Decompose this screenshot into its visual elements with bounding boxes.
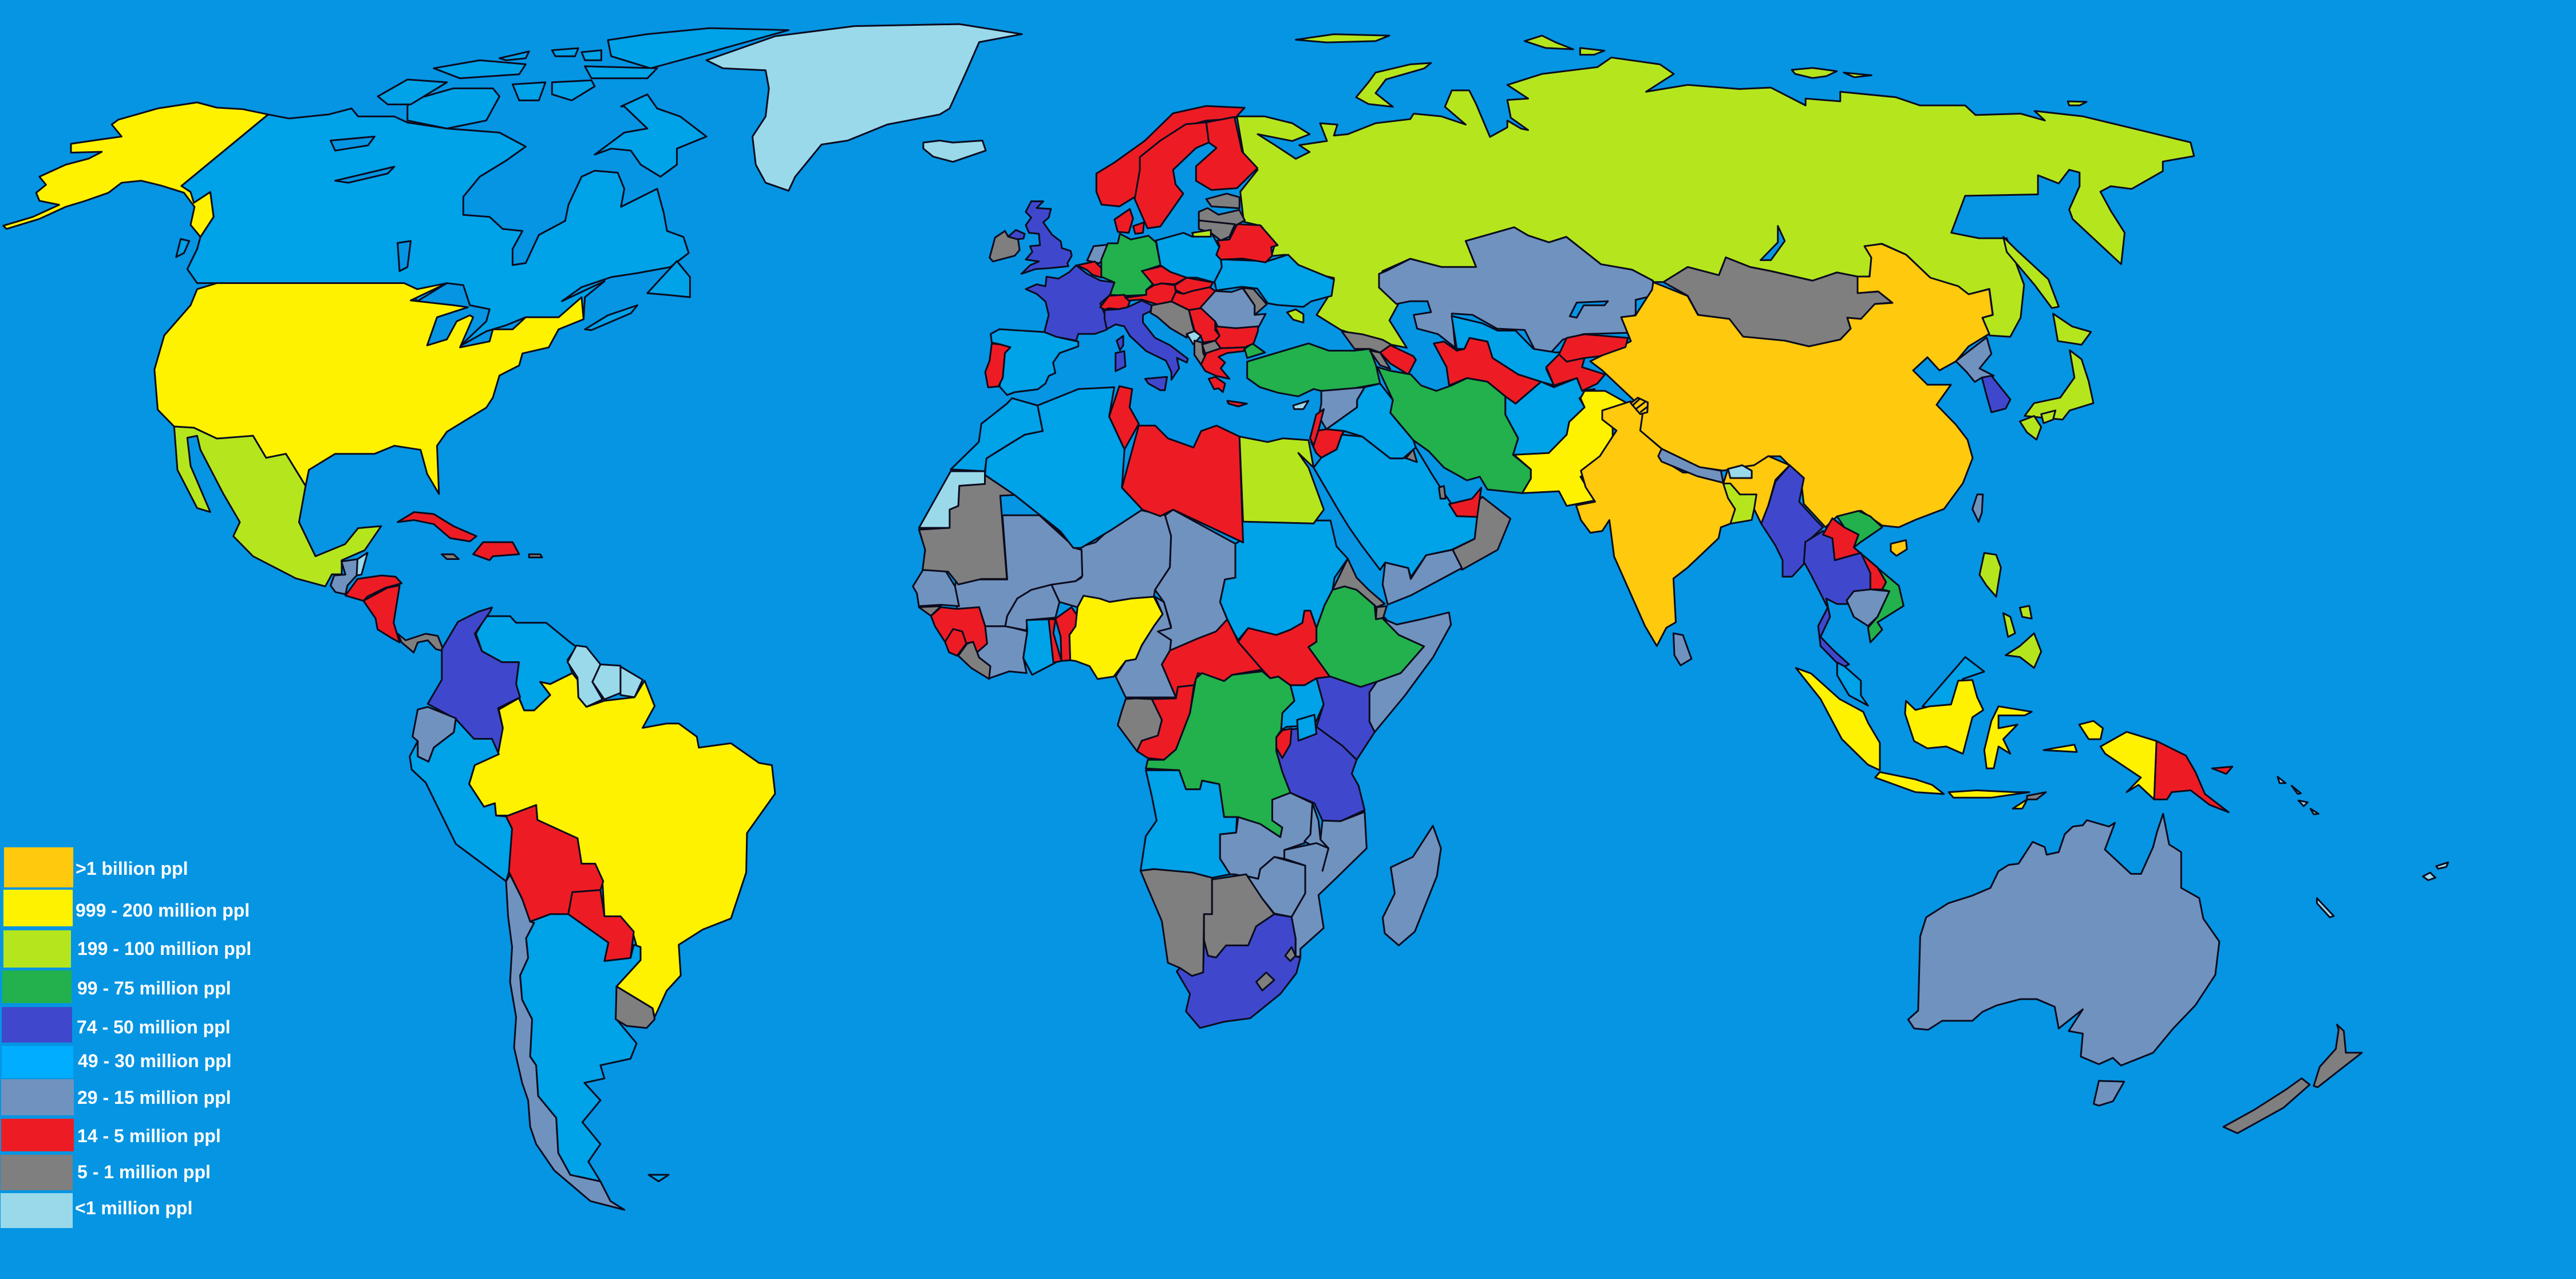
country: Belarus — [1216, 224, 1278, 262]
country: Kyrgyzstan — [1556, 334, 1628, 362]
country: Kazakhstan — [1379, 227, 1653, 354]
country: Mexico — [174, 427, 381, 586]
legend item: 5 to 1 million: 5 - 1 million ppl — [77, 1162, 211, 1182]
country: Taiwan — [1973, 495, 1983, 522]
country: Togo — [1049, 619, 1061, 663]
country: Uruguay — [616, 986, 655, 1028]
region: northern Eurasia — [1237, 34, 2194, 354]
country: Nigeria — [1069, 596, 1163, 679]
country: Indonesia — [1796, 668, 2156, 808]
country: Slovakia — [1175, 278, 1213, 294]
country: Azerbaijan — [1380, 345, 1416, 374]
legend — [1, 847, 251, 1228]
country: Niger — [1040, 508, 1173, 607]
country: Cyprus — [1293, 401, 1309, 409]
country: Madagascar — [1382, 826, 1441, 945]
country: Hungary — [1171, 287, 1215, 310]
country: Eritrea — [1333, 559, 1385, 607]
territory: Western Sahara — [919, 471, 985, 528]
country: Mongolia — [1664, 258, 1893, 346]
country: Nepal — [1658, 449, 1723, 483]
territory: Kashmir hatched — [1631, 398, 1648, 414]
country: Tajikistan — [1546, 354, 1605, 391]
country: Myanmar — [1761, 465, 1823, 577]
legend item: 5 to 1 million — [1, 1155, 211, 1190]
country: Ukraine — [1214, 255, 1334, 307]
country: Pakistan — [1514, 391, 1628, 506]
region: Western and Central Europe — [985, 202, 1278, 406]
islands: Falklands — [649, 1175, 669, 1182]
country: Saudi Arabia — [1314, 435, 1477, 577]
country: Somalia — [1369, 613, 1451, 732]
country: Lesotho — [1256, 973, 1274, 990]
country: Vietnam — [1837, 511, 1903, 642]
country: Thailand — [1804, 531, 1870, 668]
country: Lithuania — [1199, 220, 1235, 240]
country: Ivory Coast — [977, 626, 1028, 678]
country: Mali — [955, 515, 1082, 626]
country: Spain — [991, 329, 1078, 395]
country: Belgium — [1077, 262, 1103, 278]
legend item: 29 to 15 million — [1, 1079, 231, 1115]
country: French Guiana — [621, 666, 643, 697]
country: Serbia — [1189, 308, 1220, 342]
country: Greece — [1201, 348, 1247, 406]
country: Germany — [1101, 234, 1160, 296]
country: Turkey — [1244, 344, 1380, 396]
legend item: 14 to 5 million — [1, 1119, 221, 1151]
country: Philippines — [1980, 553, 2041, 668]
legend item: 99 to 75 million — [2, 970, 231, 1003]
legend item: over 1 billion — [4, 847, 188, 887]
country: Zambia — [1220, 793, 1313, 879]
legend item: 14 to 5 million: 14 - 5 million ppl — [77, 1126, 221, 1146]
country: Botswana — [1204, 874, 1274, 958]
country: Zimbabwe — [1246, 857, 1305, 917]
country: United States (lower 48) — [155, 283, 583, 494]
country: Cameroon — [1116, 597, 1176, 697]
country: Sweden — [1135, 123, 1209, 228]
island: Hainan — [1891, 540, 1907, 556]
country: New Zealand — [2223, 1025, 2362, 1133]
country: Tanzania — [1277, 727, 1365, 821]
country: Iraq — [1326, 384, 1416, 459]
country: Peru — [410, 719, 512, 881]
country: Yemen — [1382, 550, 1462, 605]
country: North Korea — [1956, 337, 1994, 382]
country: Alaska — [3, 102, 268, 237]
country: East Timor — [2027, 792, 2046, 799]
country: DR Congo — [1146, 672, 1294, 837]
country: Panama — [398, 634, 444, 653]
country: Uzbekistan — [1452, 316, 1572, 385]
country: Austria — [1125, 283, 1176, 305]
country: Norway — [1096, 106, 1244, 207]
country: Algeria — [985, 387, 1143, 548]
region: Oceania — [1908, 777, 2448, 1133]
country: Laos — [1823, 518, 1886, 590]
country: Burkina Faso — [1005, 585, 1060, 630]
region: Central and South America — [330, 552, 775, 1210]
country: Libya — [1122, 425, 1243, 543]
country: Oman — [1453, 497, 1511, 570]
country: Ecuador — [413, 707, 456, 761]
country: Mauritania — [919, 475, 1014, 585]
country: Macedonia — [1202, 341, 1220, 354]
country: Iran — [1377, 367, 1531, 493]
country: Jamaica — [441, 554, 459, 559]
country: Montenegro — [1187, 331, 1201, 345]
country: Angola — [1140, 770, 1237, 878]
country: India — [1576, 401, 1789, 646]
country: Qatar — [1439, 486, 1445, 499]
country: New Caledonia and Pacific islands — [2278, 777, 2448, 917]
country: South Africa — [1177, 914, 1301, 1028]
country: Guyana — [567, 646, 602, 707]
country: Guinea — [931, 607, 987, 652]
legend item: 49 to 30 million — [2, 1046, 231, 1078]
country: Croatia and Bosnia — [1151, 302, 1195, 338]
lake: Victoria — [1297, 714, 1317, 741]
country: Honduras — [345, 575, 402, 601]
territory: Kaliningrad — [1192, 230, 1211, 236]
region: Nordics, Eastern Europe, North Africa and Middle East — [919, 106, 1628, 605]
country: Canada — [176, 28, 789, 346]
country: Republic of Congo — [1137, 685, 1194, 760]
country: Gabon — [1117, 698, 1162, 751]
country: Bangladesh — [1723, 484, 1756, 524]
country: Estonia — [1206, 194, 1239, 208]
country: Italy — [1105, 301, 1188, 390]
country: Sri Lanka — [1673, 633, 1692, 665]
country: Portugal — [985, 344, 1010, 388]
legend item: 999 to 200 million — [3, 890, 250, 926]
country: Guatemala — [330, 559, 357, 594]
country: Greenland — [706, 24, 1022, 191]
legend item: under 1 million — [1, 1193, 192, 1228]
region: South and East Asia — [1576, 314, 2233, 812]
country: Finland — [1196, 117, 1258, 190]
country: France — [1026, 265, 1115, 341]
legend item: 74 to 50 million — [2, 1007, 230, 1043]
country: Iceland — [923, 141, 986, 162]
legend item: 49 to 30 million: 49 - 30 million ppl — [78, 1051, 231, 1071]
country: Guinea-Bissau — [919, 606, 941, 616]
country: Ireland — [990, 231, 1020, 262]
country: Russia — [1237, 34, 2194, 348]
country: Sudan — [1220, 520, 1348, 640]
country: Malawi — [1305, 803, 1329, 871]
region: Sub-Saharan Africa — [913, 508, 1451, 1028]
country: United Arab Emirates — [1449, 488, 1481, 517]
country: Cambodia — [1847, 590, 1890, 626]
country: Puerto Rico — [529, 554, 542, 558]
country: Egypt — [1239, 436, 1324, 523]
country: Chad — [1155, 510, 1235, 650]
legend item: 29 to 15 million: 29 - 15 million ppl — [77, 1087, 231, 1108]
country: Papua New Guinea — [2154, 741, 2233, 812]
country: Argentina — [520, 914, 641, 1182]
country: United Kingdom — [1008, 202, 1072, 274]
legend item: 199 to 100 million: 199 - 100 million ppl — [77, 938, 251, 959]
country: Venezuela — [476, 616, 576, 710]
legend item: 74 to 50 million: 74 - 50 million ppl — [77, 1017, 230, 1037]
country: Uganda — [1281, 678, 1323, 731]
country: Kuwait — [1406, 449, 1417, 462]
country: Netherlands — [1087, 244, 1108, 263]
country: Denmark — [1115, 209, 1144, 234]
country: Colombia — [428, 607, 520, 754]
country: Latvia — [1199, 208, 1245, 225]
region: North America — [3, 24, 1022, 586]
country: Bulgaria — [1215, 326, 1258, 348]
country: Georgia — [1342, 331, 1396, 353]
country: Australia — [1908, 814, 2219, 1106]
country: South Korea — [1982, 376, 2010, 412]
country: Malaysia — [1837, 657, 1984, 708]
country: Israel and Lebanon — [1310, 409, 1324, 445]
country: Afghanistan — [1506, 378, 1595, 455]
country: Albania — [1195, 341, 1207, 365]
country: Poland — [1156, 233, 1222, 282]
legend item: 999 to 200 million: 999 - 200 million ppl — [76, 900, 250, 921]
country: Romania — [1200, 288, 1266, 328]
country: Nicaragua and Costa Rica — [364, 586, 400, 642]
country: Benin — [1056, 607, 1077, 661]
lake: Baikal — [1760, 226, 1785, 260]
country: Central African Republic — [1162, 619, 1262, 697]
country: Paraguay — [568, 890, 634, 961]
country: Brazil — [469, 673, 775, 1017]
country: Liberia — [958, 642, 990, 679]
country: Kenya — [1317, 677, 1377, 760]
country: Bolivia — [506, 805, 603, 922]
country: Armenia — [1370, 351, 1390, 369]
country: China — [1590, 244, 1993, 527]
country: Bhutan — [1728, 465, 1752, 478]
country: Japan — [2020, 314, 2093, 440]
country: Syria — [1319, 387, 1365, 429]
country: Ghana — [1024, 619, 1056, 675]
country: Swaziland — [1285, 947, 1295, 961]
country: Switzerland — [1100, 295, 1130, 310]
country: Morocco — [951, 398, 1042, 471]
country: Senegal — [913, 570, 959, 606]
country: Turkmenistan — [1434, 338, 1541, 404]
country: Hispaniola — [473, 542, 519, 560]
country: Namibia — [1140, 869, 1212, 976]
country: Belize — [357, 552, 368, 575]
country: Ethiopia — [1309, 586, 1424, 687]
legend item: 99 to 75 million: 99 - 75 million ppl — [77, 978, 231, 998]
country: Jordan — [1311, 429, 1344, 457]
country: Mozambique — [1285, 812, 1366, 957]
country: Sierra Leone — [945, 629, 966, 656]
lakes: Great Bear, Great Slave, Winnipeg — [330, 137, 411, 271]
country: South Sudan — [1238, 611, 1330, 685]
country: Chile — [506, 875, 625, 1210]
country: Djibouti — [1376, 606, 1386, 619]
country: Moldova — [1243, 288, 1267, 315]
country: Cuba — [398, 512, 476, 542]
territory: Crimea — [1287, 309, 1303, 322]
lake: Balkhash — [1570, 301, 1608, 318]
country: Czech Republic — [1142, 266, 1187, 285]
country: Tunisia — [1109, 386, 1139, 449]
legend item: under 1 million: <1 million ppl — [75, 1198, 192, 1218]
legend item: over 1 billion: >1 billion ppl — [76, 858, 188, 879]
country: Suriname — [592, 664, 621, 700]
country: Rwanda and Burundi — [1277, 729, 1291, 758]
legend item: 199 to 100 million — [3, 930, 251, 968]
